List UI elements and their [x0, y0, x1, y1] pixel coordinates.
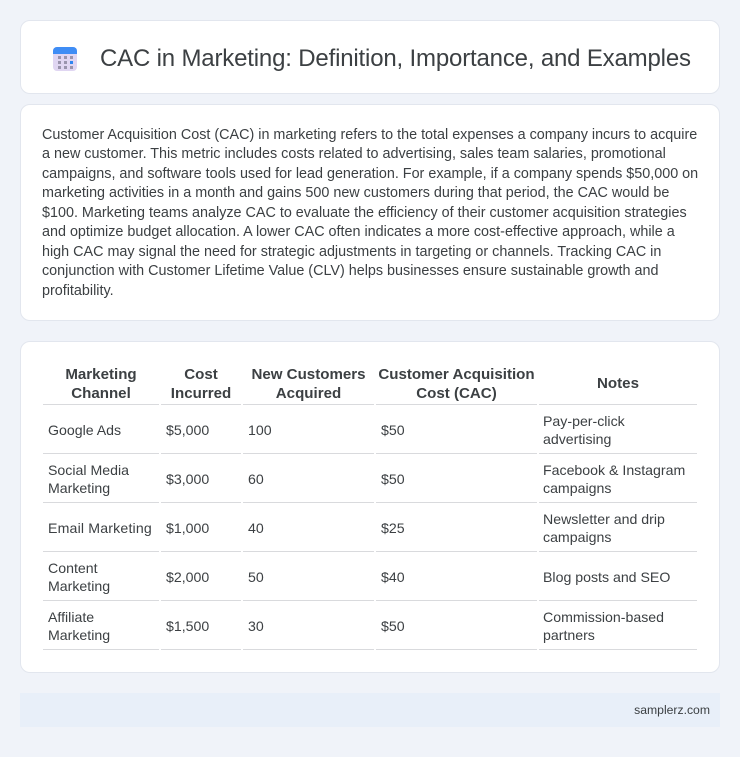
row: Affiliate Marketing: partners: [543, 627, 595, 643]
row: Social Media Marketing: $50: [381, 471, 405, 487]
row: Content Marketing: $40: [381, 569, 405, 585]
table header: new customers: Acquired: [276, 385, 341, 402]
row: Content Marketing: Marketing: [48, 578, 110, 594]
row: Email Marketing: $25: [381, 520, 405, 536]
icon: calendar: [53, 47, 77, 71]
table header: cost incurred: [171, 366, 231, 402]
panel: table: [20, 341, 720, 673]
row: Google Ads: $50: [381, 422, 405, 438]
table header: CAC: [378, 366, 535, 402]
row: Email Marketing: 40: [248, 520, 264, 536]
footer bar: [20, 693, 720, 727]
row: Affiliate Marketing: $50: [381, 618, 405, 634]
text block: description: $100. Marketing teams analyze CAC to evaluate the efficiency of their customer acquisition strategies: [42, 205, 687, 221]
row: Google Ads: $5,000: [166, 422, 209, 438]
row: Affiliate Marketing: Affiliate: [48, 609, 94, 625]
text block: description: a new customer. This metric includes costs related to advertising, sales team salaries, promotional: [42, 146, 666, 162]
row: Google Ads: Pay-per-click: [543, 413, 625, 429]
table header: notes: Notes: [597, 375, 639, 392]
text block: description: conjunction with Customer Lifetime Value (CLV) helps businesses ensure sustainable growth and: [42, 263, 658, 279]
row: Affiliate Marketing: 30: [248, 618, 264, 634]
row: Social Media Marketing: Marketing: [48, 480, 110, 496]
table header: CAC: Customer Acquisition: [378, 366, 535, 383]
row: Email Marketing: $1,000: [166, 520, 209, 536]
text block: description: [42, 127, 698, 298]
row: Google Ads: [48, 413, 625, 447]
table header: cost incurred: Cost: [184, 366, 218, 383]
row: Content Marketing: Content: [48, 560, 98, 576]
row: Google Ads: 100: [248, 422, 272, 438]
row: Affiliate Marketing: $1,500: [166, 618, 209, 634]
row: Content Marketing: 50: [248, 569, 264, 585]
table header: marketing channel: Channel: [71, 385, 131, 402]
text block: description: campaigns, and software tools used for lead generation. For example, if a company spends $50,000 on: [42, 166, 698, 182]
panel: description: [20, 104, 720, 321]
row: Social Media Marketing: Social Media: [48, 462, 129, 478]
row: Social Media Marketing: 60: [248, 471, 264, 487]
title: CAC in Marketing: Definition, Importance, and Examples: [100, 45, 691, 72]
text block: description: marketing activities in a month and gains 500 new customers during that period, the CAC would be: [42, 185, 669, 201]
table header: cost incurred: Incurred: [171, 385, 231, 402]
row: Content Marketing: Blog posts and SEO: [543, 569, 670, 585]
text block: description: and optimize budget allocation. A lower CAC often indicates a more cost-effective approach, while a: [42, 224, 675, 240]
table header: new customers: [251, 366, 366, 402]
row: Google Ads: Google Ads: [48, 422, 121, 438]
footer text: samplerz.com: [634, 703, 710, 717]
row: Email Marketing: campaigns: [543, 529, 611, 545]
row: Email Marketing: Email Marketing: [48, 520, 152, 536]
text block: description: high CAC may signal the need for strategic adjustments in targeting or channels. Tracking CAC in: [42, 244, 661, 260]
row: Social Media Marketing: [48, 462, 685, 496]
row: Affiliate Marketing: Marketing: [48, 627, 110, 643]
row: Social Media Marketing: $3,000: [166, 471, 209, 487]
header card: [20, 20, 720, 94]
text block: description: Customer Acquisition Cost (CAC) in marketing refers to the total expenses a company incurs to acquire: [42, 127, 697, 143]
table header: CAC: Cost (CAC): [416, 385, 497, 402]
row: Affiliate Marketing: [48, 609, 664, 643]
table header: new customers: New Customers: [251, 366, 366, 383]
row: Email Marketing: [48, 511, 665, 545]
table header: marketing channel: Marketing: [65, 366, 137, 383]
row: Email Marketing: Newsletter and drip: [543, 511, 665, 527]
text block: description: profitability.: [42, 282, 114, 298]
row: Social Media Marketing: campaigns: [543, 480, 611, 496]
table header: marketing channel: [65, 366, 137, 402]
row: Content Marketing: [48, 560, 670, 594]
row: Affiliate Marketing: Commission-based: [543, 609, 664, 625]
row: Content Marketing: $2,000: [166, 569, 209, 585]
row: Google Ads: advertising: [543, 431, 611, 447]
row: Social Media Marketing: Facebook & Instagram: [543, 462, 685, 478]
